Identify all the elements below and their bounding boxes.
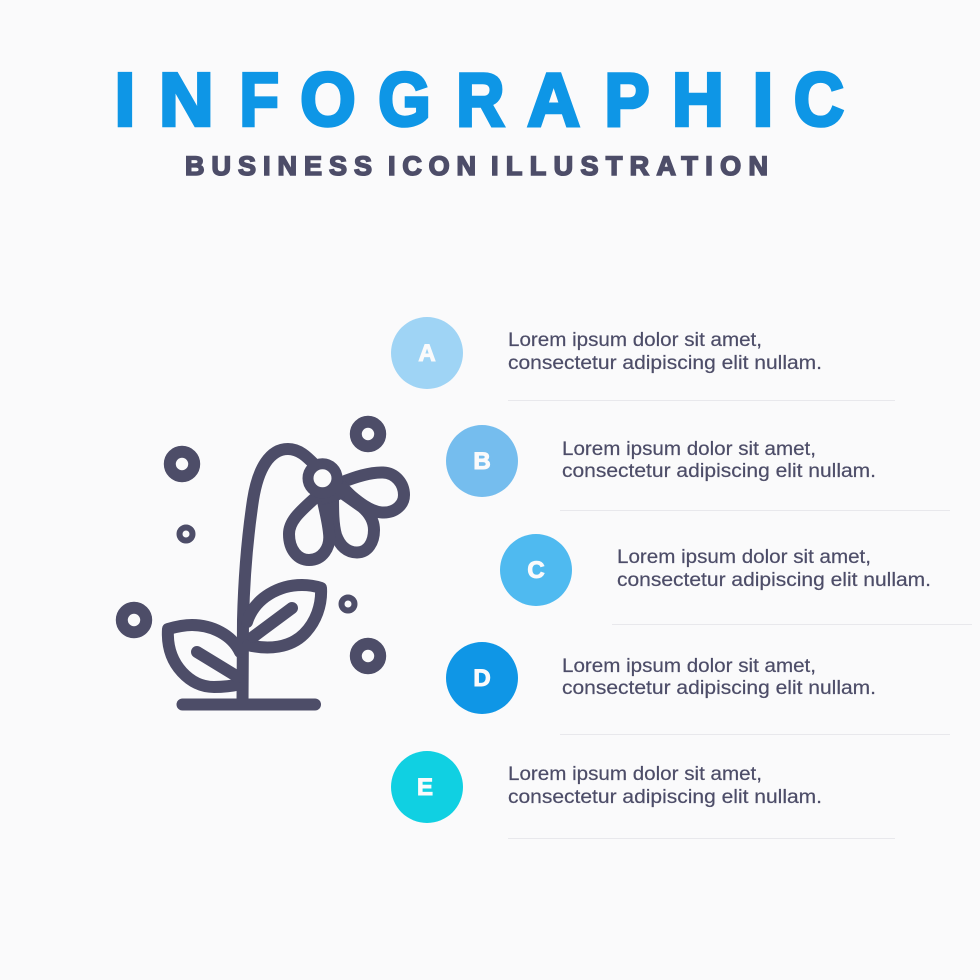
title: I — [114, 58, 135, 142]
badge D: D — [473, 665, 491, 692]
subtitle: ILLUSTRATION — [491, 151, 768, 181]
title: F — [240, 58, 279, 142]
title: N — [159, 58, 214, 141]
title: A — [527, 57, 580, 142]
title: P — [604, 58, 650, 142]
badge A — [391, 317, 463, 389]
step D — [446, 642, 950, 735]
badge E: E — [417, 774, 433, 801]
text C — [617, 547, 931, 591]
icon: upper leaf — [247, 585, 321, 647]
title: G — [378, 58, 431, 142]
icon: lower leaf — [168, 625, 241, 687]
title: H — [672, 58, 724, 142]
title: R — [456, 59, 504, 142]
step C — [500, 534, 972, 625]
text D: consectetur adipiscing elit nullam. — [562, 678, 876, 699]
icon: petals — [289, 472, 404, 560]
subtitle — [185, 151, 768, 181]
icon: stem — [242, 449, 316, 704]
text C: consectetur adipiscing elit nullam. — [617, 570, 931, 591]
subtitle: ICON — [388, 151, 476, 181]
title — [114, 57, 844, 142]
text E — [508, 764, 822, 808]
text E: Lorem ipsum dolor sit amet, — [508, 764, 762, 785]
title: C — [794, 59, 844, 142]
text A — [508, 330, 822, 374]
icon: drooping flower — [122, 422, 404, 704]
badge C: C — [527, 557, 545, 584]
icon: floating dots — [122, 422, 380, 668]
badge D — [446, 642, 518, 714]
badge E — [391, 751, 463, 823]
text A: consectetur adipiscing elit nullam. — [508, 353, 822, 374]
text B: Lorem ipsum dolor sit amet, — [562, 439, 816, 460]
text E: consectetur adipiscing elit nullam. — [508, 787, 822, 808]
icon: ground — [182, 698, 315, 710]
text B: consectetur adipiscing elit nullam. — [562, 461, 876, 482]
icon: flower centre — [308, 464, 337, 493]
title: O — [300, 59, 356, 142]
text D — [562, 656, 876, 699]
text D: Lorem ipsum dolor sit amet, — [562, 656, 816, 677]
badge C — [500, 534, 572, 606]
subtitle: BUSINESS — [185, 151, 372, 181]
badge B: B — [473, 448, 491, 475]
badge B — [446, 425, 518, 497]
badge A: A — [418, 340, 436, 367]
text A: Lorem ipsum dolor sit amet, — [508, 330, 762, 351]
text C: Lorem ipsum dolor sit amet, — [617, 547, 871, 568]
text B — [562, 439, 876, 482]
title: I — [752, 58, 773, 142]
step A — [391, 317, 895, 401]
step B — [446, 425, 950, 511]
step E — [391, 751, 895, 839]
